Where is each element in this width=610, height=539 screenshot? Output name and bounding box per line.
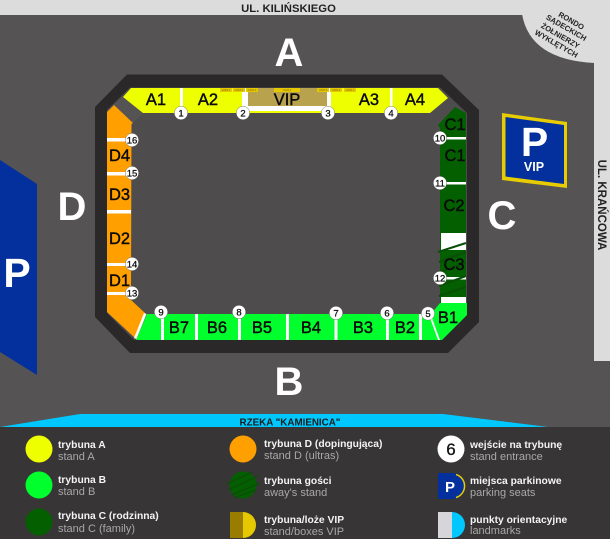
legend: away stand: trybuna gości — [264, 476, 332, 487]
stand C: C3 — [443, 256, 465, 274]
stand A: LOŻA 7 — [346, 89, 355, 92]
away stand hatching — [438, 243, 466, 296]
river Kamienica: RZEKA "KAMIENICA" — [240, 418, 340, 428]
stand C: C2 — [443, 197, 465, 215]
stand letter D: D — [58, 185, 86, 229]
pitch interior — [107, 88, 467, 340]
stand A: A2 — [198, 91, 218, 109]
street: ul. Kilińskiego: UL. KILIŃSKIEGO — [241, 2, 336, 15]
stand D: D4 — [109, 147, 130, 165]
legend: stand C: trybuna C (rodzinna) — [58, 511, 159, 522]
legend: parking seats: P — [445, 479, 455, 496]
entrance numbers: 8 — [236, 308, 242, 318]
entrance numbers — [125, 106, 447, 320]
parking VIP: VIP — [524, 160, 544, 174]
river Kamienica — [0, 414, 548, 428]
VIP box — [242, 88, 331, 111]
legend: away stand — [227, 472, 332, 499]
legend: stand A: trybuna A — [58, 440, 106, 451]
stand A: A1 — [146, 91, 166, 109]
stand A: LOŻA 2 — [235, 89, 244, 92]
legend: landmarks: punkty orientacyjne — [470, 515, 568, 526]
stand A — [123, 88, 448, 113]
legend: stand D: stand D (ultras) — [264, 450, 339, 462]
stand D: D2 — [109, 230, 130, 248]
entrance numbers: 15 — [127, 168, 137, 180]
stand letter B: B — [275, 360, 303, 404]
boxes row — [220, 88, 356, 92]
entrance numbers: 13 — [127, 288, 137, 300]
landmark: Rondo Sądeckich Żołnierzy Wyklętych: SĄDECKICH — [544, 13, 588, 43]
stand letter C: C — [488, 194, 516, 238]
stadium outer ring — [95, 74, 479, 353]
stand A: LOŻA 6 — [332, 89, 341, 92]
legend: parking seats — [438, 473, 562, 499]
legend: stand entrance — [438, 436, 562, 463]
entrance numbers: 10 — [435, 134, 445, 144]
stand C: C1 — [444, 116, 466, 134]
entrance numbers: 5 — [425, 309, 431, 320]
legend: stand C: stand C (family) — [58, 523, 135, 535]
stand D: D3 — [109, 186, 130, 204]
stand A: LOŻA 4 — [283, 89, 292, 92]
stand A: LOŻA 5 — [319, 89, 328, 92]
parking VIP: P — [521, 119, 548, 165]
legend: stand entrance: 6 — [446, 440, 456, 459]
entrance numbers: 16 — [127, 136, 137, 146]
stand B: B4 — [301, 319, 321, 337]
stand B: B1 — [438, 309, 458, 327]
VIP box: VIP — [274, 91, 300, 109]
stand C: C1 — [444, 147, 466, 165]
stand D: D1 — [109, 272, 130, 290]
legend: stand D: trybuna D (dopingująca) — [264, 439, 382, 450]
legend: stand A: stand A — [58, 451, 95, 463]
stand B: B2 — [395, 319, 415, 337]
stand letter A: A — [275, 31, 303, 75]
entrance numbers: 6 — [384, 308, 390, 320]
entrance numbers: 11 — [435, 178, 445, 190]
legend: stand A — [26, 436, 106, 463]
legend panel — [0, 427, 610, 539]
stand B: B3 — [353, 319, 373, 337]
stand D — [107, 105, 146, 339]
legend: away stand: away's stand — [264, 487, 327, 499]
entrance numbers: 2 — [240, 108, 246, 120]
legend: stand entrance: wejście na trybunę — [469, 440, 562, 451]
legend: stand C — [26, 508, 159, 536]
parking P left: P — [3, 250, 31, 296]
legend: stand B: trybuna B — [58, 475, 106, 486]
entrance numbers: 1 — [178, 108, 184, 120]
street: ul. Krańcowa: UL. KRAŃCOWA — [595, 160, 608, 250]
landmark: Rondo Sądeckich Żołnierzy Wyklętych: RONDO — [557, 10, 586, 32]
stand A: A4 — [405, 91, 425, 109]
legend: landmarks: landmarks — [470, 525, 521, 537]
entrance numbers: 7 — [333, 308, 339, 320]
legend: VIP stand: trybuna/loże VIP — [264, 515, 344, 526]
stand B: B6 — [207, 319, 227, 337]
stand A: LOŻA 3 — [248, 89, 257, 92]
legend: stand entrance: stand entrance — [470, 451, 543, 463]
legend: VIP stand — [230, 512, 344, 538]
entrance numbers: 9 — [158, 308, 164, 318]
landmark: Rondo Sądeckich Żołnierzy Wyklętych: WYKLĘTYCH — [533, 28, 579, 60]
street: ul. Kilińskiego — [0, 0, 610, 15]
parking P left — [0, 160, 37, 375]
stand B: B5 — [252, 319, 272, 337]
entrance numbers: 12 — [435, 274, 445, 284]
entrance numbers: 14 — [127, 260, 137, 270]
landmark: Rondo Sądeckich Żołnierzy Wyklętych — [522, 10, 595, 63]
legend: stand B — [26, 472, 106, 498]
corner gap top-left — [107, 88, 143, 123]
legend: parking seats: miejsca parkinowe — [470, 476, 562, 487]
legend: parking seats: parking seats — [470, 487, 536, 499]
entrance numbers: 4 — [388, 108, 394, 120]
stand A: A3 — [359, 91, 379, 109]
legend: landmarks — [438, 512, 568, 538]
legend: VIP stand: stand/boxes VIP — [264, 526, 344, 538]
stand B — [136, 303, 467, 340]
street: ul. Krańcowa — [594, 15, 610, 361]
landmark: Rondo Sądeckich Żołnierzy Wyklętych: ŻOŁNIERZY — [539, 21, 581, 50]
stand C — [438, 107, 466, 303]
entrance numbers: 3 — [325, 108, 331, 120]
legend: stand D — [230, 436, 382, 462]
legend: stand B: stand B — [58, 486, 95, 498]
stand A: LOŻA 1 — [222, 89, 231, 92]
stand B: B7 — [169, 319, 189, 337]
parking VIP — [502, 113, 567, 188]
